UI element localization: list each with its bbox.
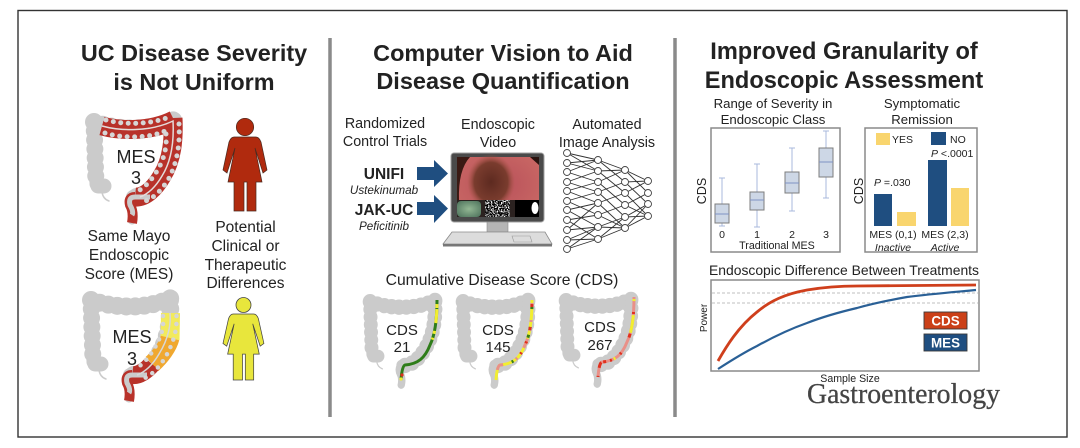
icon: colon CDS 267	[566, 297, 634, 384]
axis label: CDS box plot: CDS	[695, 178, 709, 204]
heading: left panel: is Not Uniform	[113, 69, 275, 95]
box plot chart: Traditional MES	[739, 240, 815, 252]
panel: computer vision	[343, 40, 655, 385]
heading: range of severity: Endoscopic Class	[721, 112, 826, 127]
heading: symptomatic remission: Remission	[891, 112, 953, 127]
arrow: JAK-UC to video	[417, 195, 448, 223]
bar chart: symptomatic remission: Active	[930, 242, 959, 254]
arrow: UNIFI to video	[417, 160, 448, 187]
text: same Mayo endoscopic score: Score (MES)	[85, 266, 173, 283]
icon: neural network	[564, 150, 652, 252]
bar chart: symptomatic remission	[865, 128, 977, 254]
label: MES 3 bottom: MES	[112, 327, 152, 347]
icon: yellow woman	[223, 298, 264, 380]
text: same Mayo endoscopic score: Endoscopic	[89, 247, 169, 264]
legend: YES	[892, 134, 913, 146]
text: randomized control trials: Control Trials	[343, 134, 427, 150]
text: automated image analysis	[559, 117, 655, 151]
legend: MES	[924, 334, 967, 351]
label: CDS 267	[584, 319, 616, 354]
label: CDS 145: CDS	[482, 322, 514, 339]
heading: range of severity	[714, 96, 832, 127]
text: JAK-UC trial: JAK-UC	[355, 202, 413, 219]
text: automated image analysis: Image Analysis	[559, 135, 655, 151]
heading: endoscopic difference: Endoscopic Difference Between Treatments	[709, 262, 979, 278]
text: JAK-UC trial: Peficitinib	[359, 220, 410, 233]
heading: right panel: Endoscopic Assessment	[705, 68, 983, 94]
heading: left panel: UC Disease Severity	[81, 40, 307, 66]
box plot chart	[711, 128, 840, 252]
icon: colon CDS 145	[463, 300, 532, 385]
text: endoscopic video: Endoscopic	[461, 117, 535, 133]
legend: CDS: CDS	[931, 314, 960, 328]
legend: CDS	[924, 312, 967, 329]
axis label: sample size: Sample Size	[820, 373, 880, 385]
bar chart: symptomatic remission: MES (0,1)	[869, 229, 917, 241]
heading: symptomatic remission	[884, 96, 961, 127]
label: CDS 267: CDS	[584, 319, 616, 336]
heading: middle panel	[373, 40, 633, 94]
text: UNIFI trial: Ustekinumab	[350, 184, 419, 197]
label: CDS 145	[482, 322, 514, 356]
label: CDS 21: CDS	[386, 322, 418, 339]
heading: right panel	[705, 39, 983, 94]
bar chart: symptomatic remission: Inactive	[875, 242, 911, 254]
icon: red woman	[223, 118, 267, 211]
axis label: CDS bar chart: CDS	[852, 178, 866, 204]
icon: severe colon MES 3	[94, 116, 179, 223]
text: same Mayo endoscopic score	[85, 228, 173, 283]
text: JAK-UC trial	[355, 202, 413, 233]
box plot chart: 1	[754, 229, 760, 241]
label: MES 3 bottom: 3	[127, 349, 137, 369]
text: potential differences	[205, 219, 287, 292]
text: potential differences: Differences	[206, 275, 285, 292]
text: endoscopic video	[461, 117, 535, 151]
label: MES 3 bottom	[112, 327, 152, 369]
heading: left panel	[81, 40, 307, 95]
label: CDS 21	[386, 322, 418, 356]
heading: range of severity: Range of Severity in	[714, 96, 832, 111]
heading: middle panel: Disease Quantification	[376, 68, 630, 94]
box plot chart: 3	[823, 229, 829, 241]
journal logo: Gastroenterology: Gastroenterology	[807, 378, 1000, 410]
text: potential differences: Potential	[215, 219, 276, 236]
heading: symptomatic remission: Symptomatic	[884, 96, 961, 111]
label: MES 3 top: 3	[131, 168, 141, 188]
text: potential differences: Therapeutic	[205, 257, 287, 274]
label: MES 3 top	[116, 147, 156, 188]
icon: colon CDS 21	[370, 300, 437, 385]
line chart: power curves	[711, 280, 979, 371]
heading: middle panel: Computer Vision to Aid	[373, 40, 633, 66]
bar chart: symptomatic remission: P <.0001	[931, 148, 974, 160]
bar chart: symptomatic remission: P =.030	[874, 177, 911, 189]
text: randomized control trials	[343, 116, 427, 150]
icon: mixed severity colon MES 3	[91, 298, 177, 401]
axis label: power: Power	[699, 303, 710, 332]
bar chart: symptomatic remission: MES (2,3)	[921, 229, 969, 241]
legend: NO	[950, 134, 966, 146]
bars	[874, 160, 969, 226]
heading: cumulative disease score: Cumulative Disease Score (CDS)	[386, 272, 618, 289]
label: CDS 21: 21	[394, 339, 410, 356]
text: UNIFI trial	[350, 166, 419, 197]
text: potential differences: Clinical or	[211, 238, 280, 255]
box plot chart: 0	[719, 229, 725, 241]
label: MES 3 top: MES	[116, 147, 156, 167]
text: same Mayo endoscopic score: Same Mayo	[88, 228, 170, 245]
panel: improved granularity	[695, 39, 1000, 410]
text: UNIFI trial: UNIFI	[364, 166, 404, 183]
text: randomized control trials: Randomized	[345, 116, 425, 132]
legend: MES: MES	[931, 336, 960, 350]
panel: UC disease severity	[81, 40, 307, 401]
label: CDS 145: 145	[485, 339, 511, 356]
label: CDS 267: 267	[587, 337, 613, 354]
legend	[876, 132, 966, 146]
text: automated image analysis: Automated	[572, 117, 642, 133]
text: endoscopic video: Video	[480, 135, 516, 151]
box plot chart: 2	[789, 229, 795, 241]
heading: right panel: Improved Granularity of	[710, 39, 978, 65]
icon: computer monitor	[443, 153, 552, 246]
